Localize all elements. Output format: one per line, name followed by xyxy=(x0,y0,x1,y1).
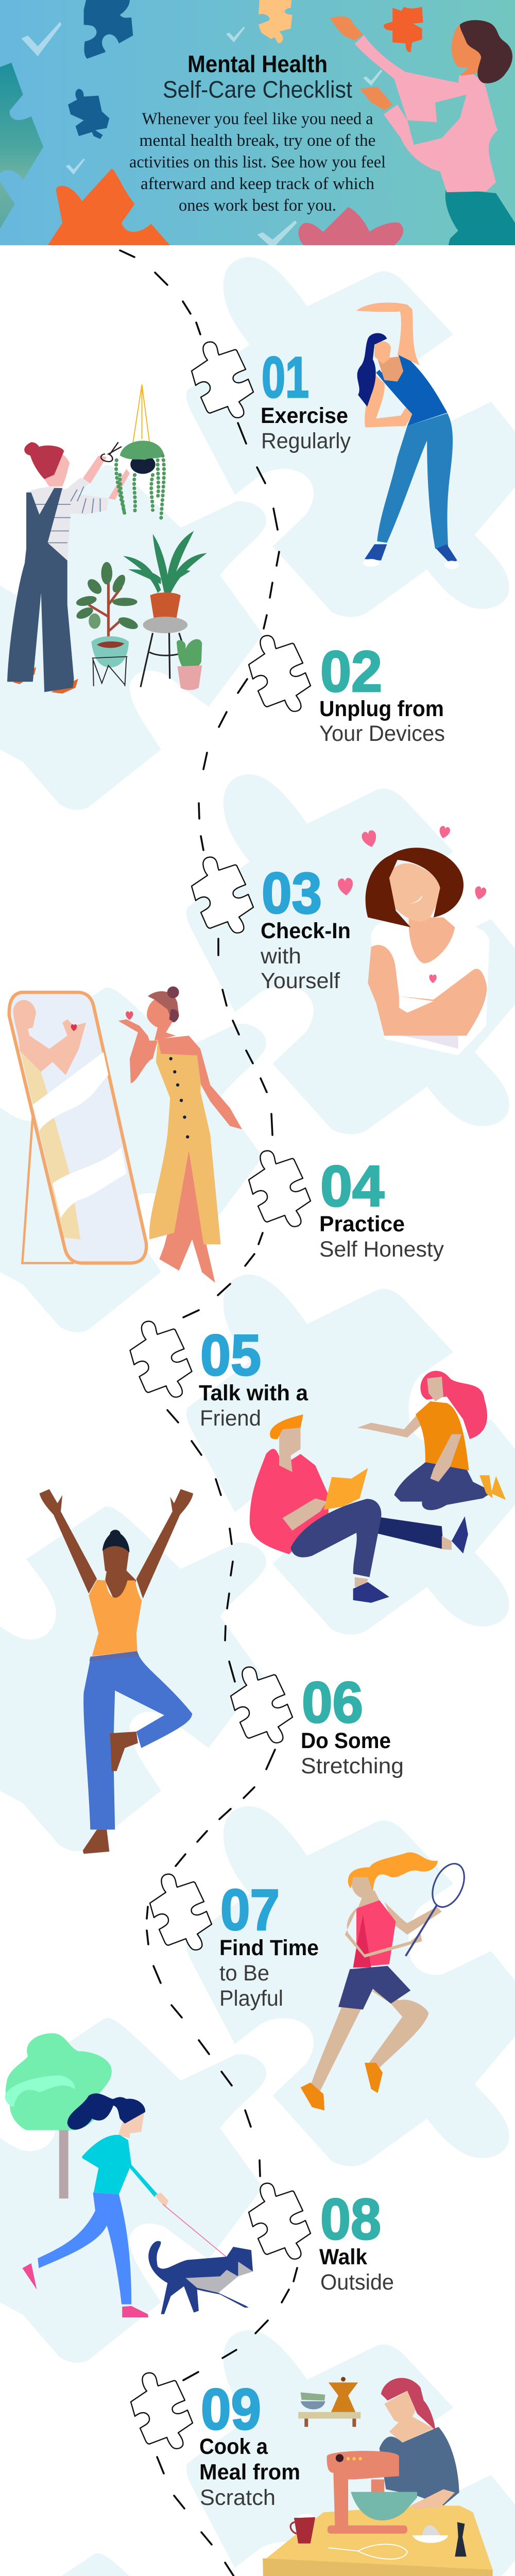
label 06: Stretching xyxy=(301,1754,404,1778)
title: Self-Care Checklist xyxy=(163,76,352,103)
intro paragraph: activities on this list. See how you feel xyxy=(129,153,386,172)
figure: woman reaching for puzzle piece xyxy=(330,16,515,245)
header banner xyxy=(0,0,515,248)
figure: hugging self woman with hearts xyxy=(337,825,489,1056)
label 03: Check-In xyxy=(261,919,351,943)
step 07: Find Time to Be Playful xyxy=(150,1874,319,2011)
step 04: Practice Self Honesty xyxy=(249,1151,444,1262)
intro paragraph: mental health break, try one of the xyxy=(139,131,376,150)
title xyxy=(163,50,352,103)
step 06: Do Some Stretching xyxy=(231,1667,404,1778)
number 08: 08 xyxy=(320,2187,381,2251)
label 06 xyxy=(301,1728,404,1778)
label 09: Meal from xyxy=(199,2460,300,2484)
number 01: 01 xyxy=(262,345,309,410)
figure: friends talking xyxy=(250,1371,506,1603)
label 05: Talk with a xyxy=(199,1381,308,1405)
icon: puzzle outline 05 xyxy=(130,1321,192,1397)
title: Mental Health xyxy=(187,50,328,77)
icon: puzzle outline 01 xyxy=(192,342,253,418)
puzzle piece: dark blue top xyxy=(84,0,133,59)
intro paragraph xyxy=(129,110,386,215)
puzzle piece: red orange xyxy=(384,7,423,52)
icon: puzzle outline 07 xyxy=(150,1874,212,1950)
figure: woman cooking at kitchen table xyxy=(263,2377,493,2576)
intro paragraph: afterward and keep track of which xyxy=(141,175,375,193)
label 06: Do Some xyxy=(301,1728,391,1753)
icon: puzzle outline 06 xyxy=(231,1667,293,1743)
number 07: 07 xyxy=(220,1877,280,1942)
puzzle piece: pink bottom xyxy=(298,207,403,245)
label 07: Playful xyxy=(219,1986,283,2011)
label 09: Cook a xyxy=(199,2434,268,2459)
label 07: Find Time xyxy=(219,1936,319,1960)
label 08: Walk xyxy=(319,2245,367,2269)
label 07 xyxy=(219,1936,319,2011)
figure: exercising woman xyxy=(356,302,459,569)
icon: puzzle outline 09 xyxy=(131,2373,193,2449)
number 09: 09 xyxy=(201,2377,261,2442)
intro paragraph: ones work best for you. xyxy=(179,196,336,215)
step 08: Walk Outside xyxy=(249,2183,394,2295)
label 08: Outside xyxy=(320,2270,394,2295)
icon: check marks xyxy=(21,22,382,248)
label 03 xyxy=(260,919,351,993)
step 01: Exercise Regularly xyxy=(192,342,351,453)
label 05 xyxy=(199,1381,308,1431)
label 03: Yourself xyxy=(261,969,340,993)
icon: puzzle outline 03 xyxy=(192,857,253,933)
label 01 xyxy=(261,403,351,453)
label 07: to Be xyxy=(219,1961,269,1986)
label 09: Scratch xyxy=(200,2485,276,2510)
step 02: Unplug from Your Devices xyxy=(249,636,445,746)
label 01: Exercise xyxy=(261,403,348,428)
figure: woman running with racket xyxy=(301,1852,471,2110)
figure: woman walking dog xyxy=(5,2033,253,2317)
number 03: 03 xyxy=(262,861,322,925)
label 04 xyxy=(319,1212,444,1262)
figure: woman in tree pose xyxy=(40,1489,193,1854)
label 01: Regularly xyxy=(261,429,351,453)
puzzle piece: small blue xyxy=(68,89,109,139)
step 05: Talk with a Friend xyxy=(130,1321,308,1431)
step 09: Cook a Meal from Scratch xyxy=(131,2373,300,2510)
label 02 xyxy=(319,697,445,746)
number 02: 02 xyxy=(320,639,382,704)
step 03: Check-In with Yourself xyxy=(192,857,351,993)
figure: woman tending plants xyxy=(7,384,207,693)
puzzle piece: orange bottom xyxy=(47,168,170,245)
number 04: 04 xyxy=(320,1154,384,1218)
number 05: 05 xyxy=(200,1323,261,1387)
intro paragraph: Whenever you feel like you need a xyxy=(142,110,373,128)
label 08 xyxy=(319,2245,394,2295)
icon: puzzle outline 04 xyxy=(249,1151,311,1227)
label 09 xyxy=(199,2434,300,2510)
puzzle piece: teal left xyxy=(0,63,43,229)
label 02: Unplug from xyxy=(319,697,444,721)
label 04: Self Honesty xyxy=(319,1237,444,1262)
label 04: Practice xyxy=(319,1212,405,1236)
icon: puzzle outline 02 xyxy=(249,636,311,711)
label 05: Friend xyxy=(200,1406,261,1431)
icon: puzzle outline 08 xyxy=(249,2183,311,2259)
puzzle piece: peach xyxy=(259,0,293,43)
dashed path xyxy=(120,250,297,2576)
figure: woman at mirror xyxy=(9,987,242,1283)
number 06: 06 xyxy=(302,1670,363,1735)
label 02: Your Devices xyxy=(319,721,445,746)
label 03: with xyxy=(260,944,301,969)
